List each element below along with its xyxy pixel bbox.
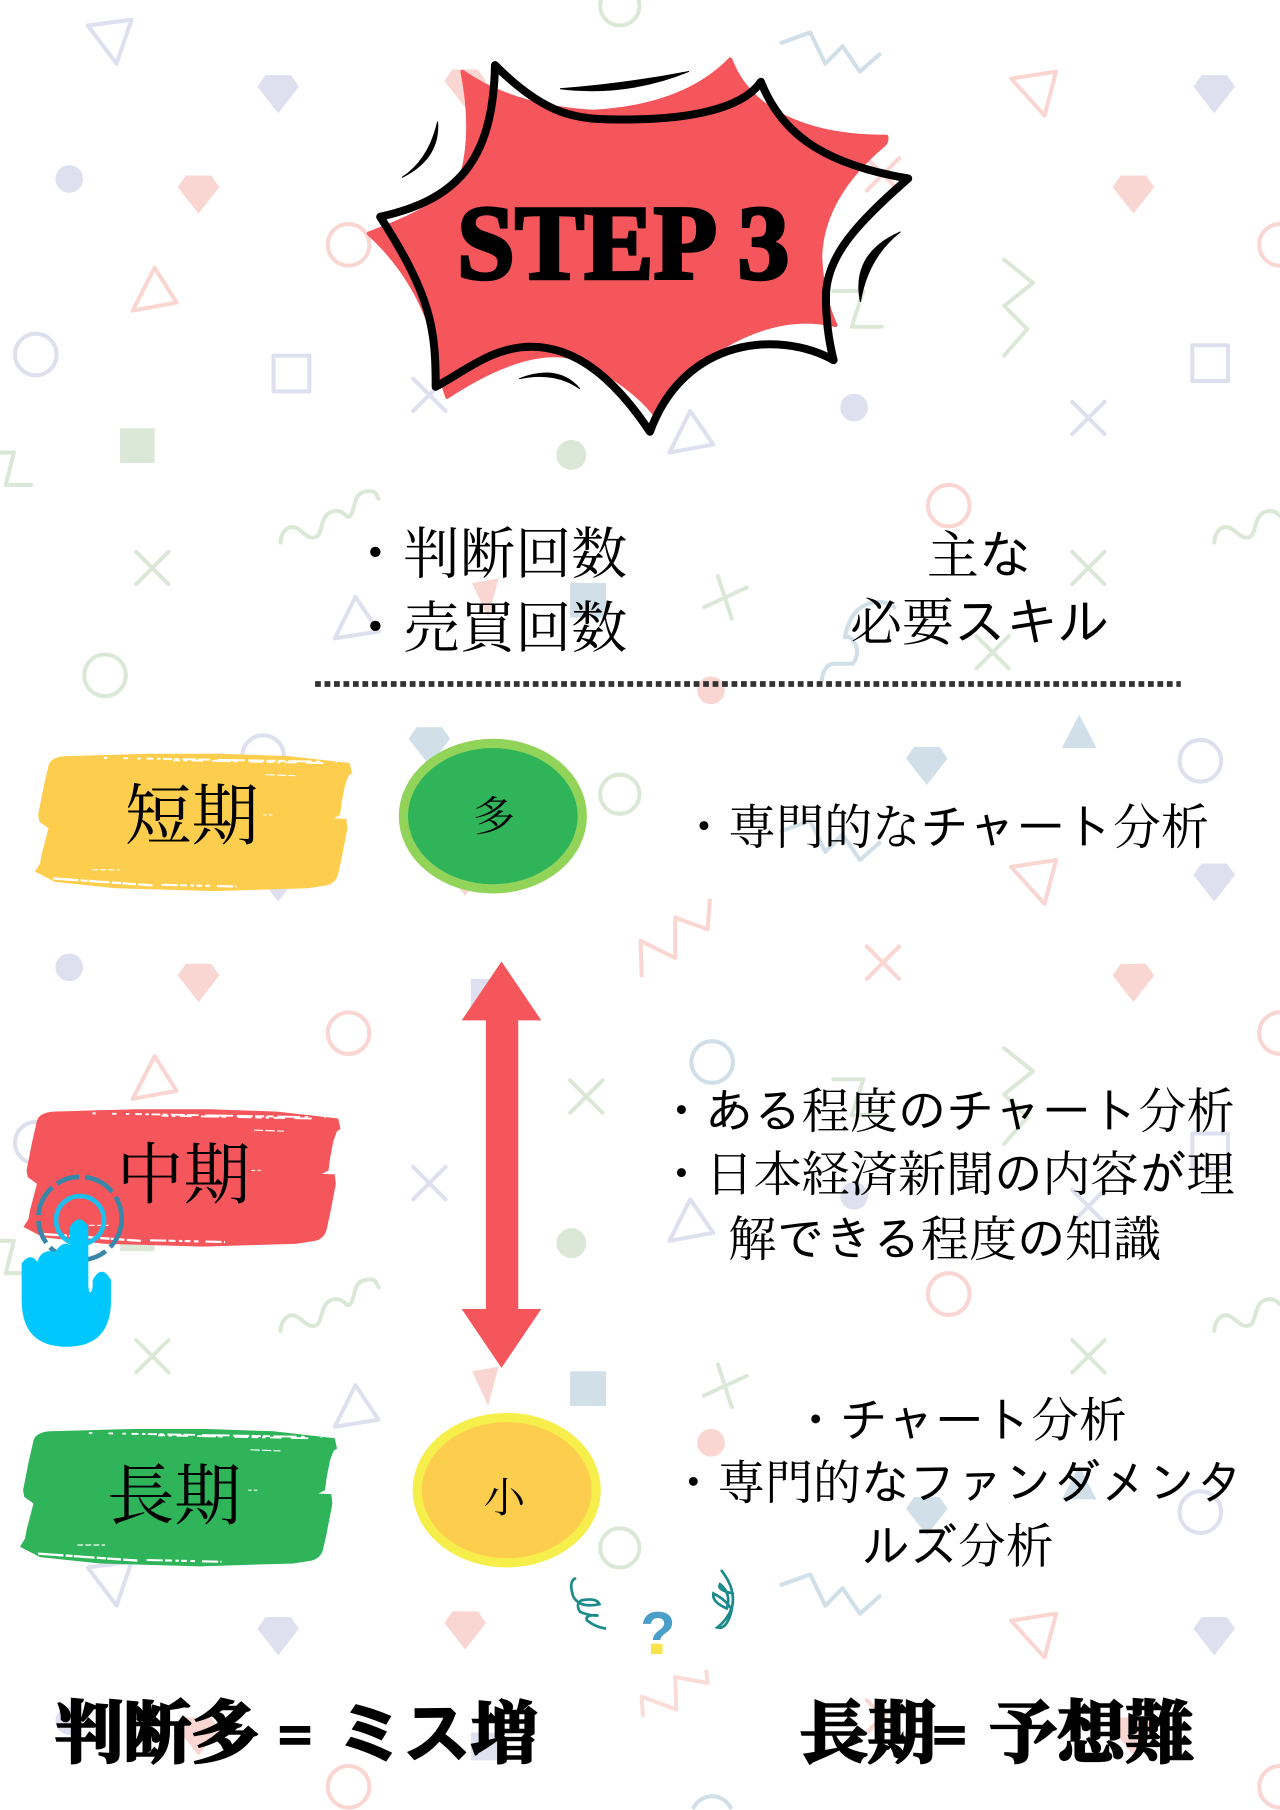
- label: long term: 長期: [107, 1460, 241, 1534]
- icon: question mark with curls: ?: [640, 1601, 676, 1665]
- burst red fill: [369, 59, 887, 418]
- dotted divider: [315, 681, 1181, 686]
- column heading: decision and trade counts: [347, 525, 627, 661]
- conclusion: more decisions mean more mistakes: =: [278, 1703, 312, 1769]
- conclusion: long term is harder to predict: 長期: [800, 1696, 936, 1772]
- label: short term: [35, 754, 352, 891]
- label: medium term: 中期: [117, 1139, 250, 1213]
- burst black outline: [380, 65, 908, 432]
- conclusion: long term is harder to predict: [800, 1696, 1193, 1772]
- skills: medium term: ・日本経済新聞の内容が理: [657, 1149, 1235, 1202]
- column heading: main required skills: [850, 529, 1110, 653]
- skills: long term: ・専門的なファンダメンタ: [669, 1457, 1244, 1510]
- skills: long term: ・チャート分析: [792, 1395, 1127, 1448]
- conclusion: more decisions mean more mistakes: [55, 1696, 538, 1772]
- circle: few: 小: [484, 1475, 527, 1521]
- column heading: decision and trade counts: ・売買回数: [347, 599, 627, 661]
- label: long term: [20, 1429, 337, 1566]
- conclusion: more decisions mean more mistakes: 判断多: [55, 1696, 260, 1772]
- skills: medium term: [657, 1086, 1235, 1267]
- skills: short term: ・専門的なチャート分析: [680, 802, 1209, 855]
- column heading: main required skills: 主な: [927, 529, 1031, 586]
- skills: long term: [669, 1395, 1244, 1574]
- conclusion: more decisions mean more mistakes: ミス増: [337, 1698, 538, 1772]
- circle: few: [417, 1417, 596, 1563]
- circle: many: [403, 743, 582, 889]
- title text: STEP 3: [457, 183, 789, 301]
- skills: long term: ルズ分析: [862, 1521, 1054, 1574]
- burst swooshes: [402, 71, 901, 389]
- icon: question mark with curls: [571, 1571, 733, 1665]
- arrow: double headed: [462, 962, 541, 1368]
- circle: many: 多: [473, 794, 515, 840]
- label: medium term: [23, 1109, 340, 1247]
- conclusion: long term is harder to predict: 予想難: [989, 1696, 1193, 1772]
- label: short term: 短期: [125, 780, 259, 854]
- skills: medium term: 解できる程度の知識: [728, 1214, 1161, 1267]
- column heading: main required skills: 必要スキル: [850, 596, 1110, 653]
- skills: medium term: ・ある程度のチャート分析: [657, 1086, 1235, 1139]
- column heading: decision and trade counts: ・判断回数: [347, 525, 627, 587]
- icon: pointing hand: [22, 1177, 122, 1347]
- conclusion: long term is harder to predict: =: [933, 1703, 967, 1769]
- burst badge: STEP 3: [369, 59, 908, 432]
